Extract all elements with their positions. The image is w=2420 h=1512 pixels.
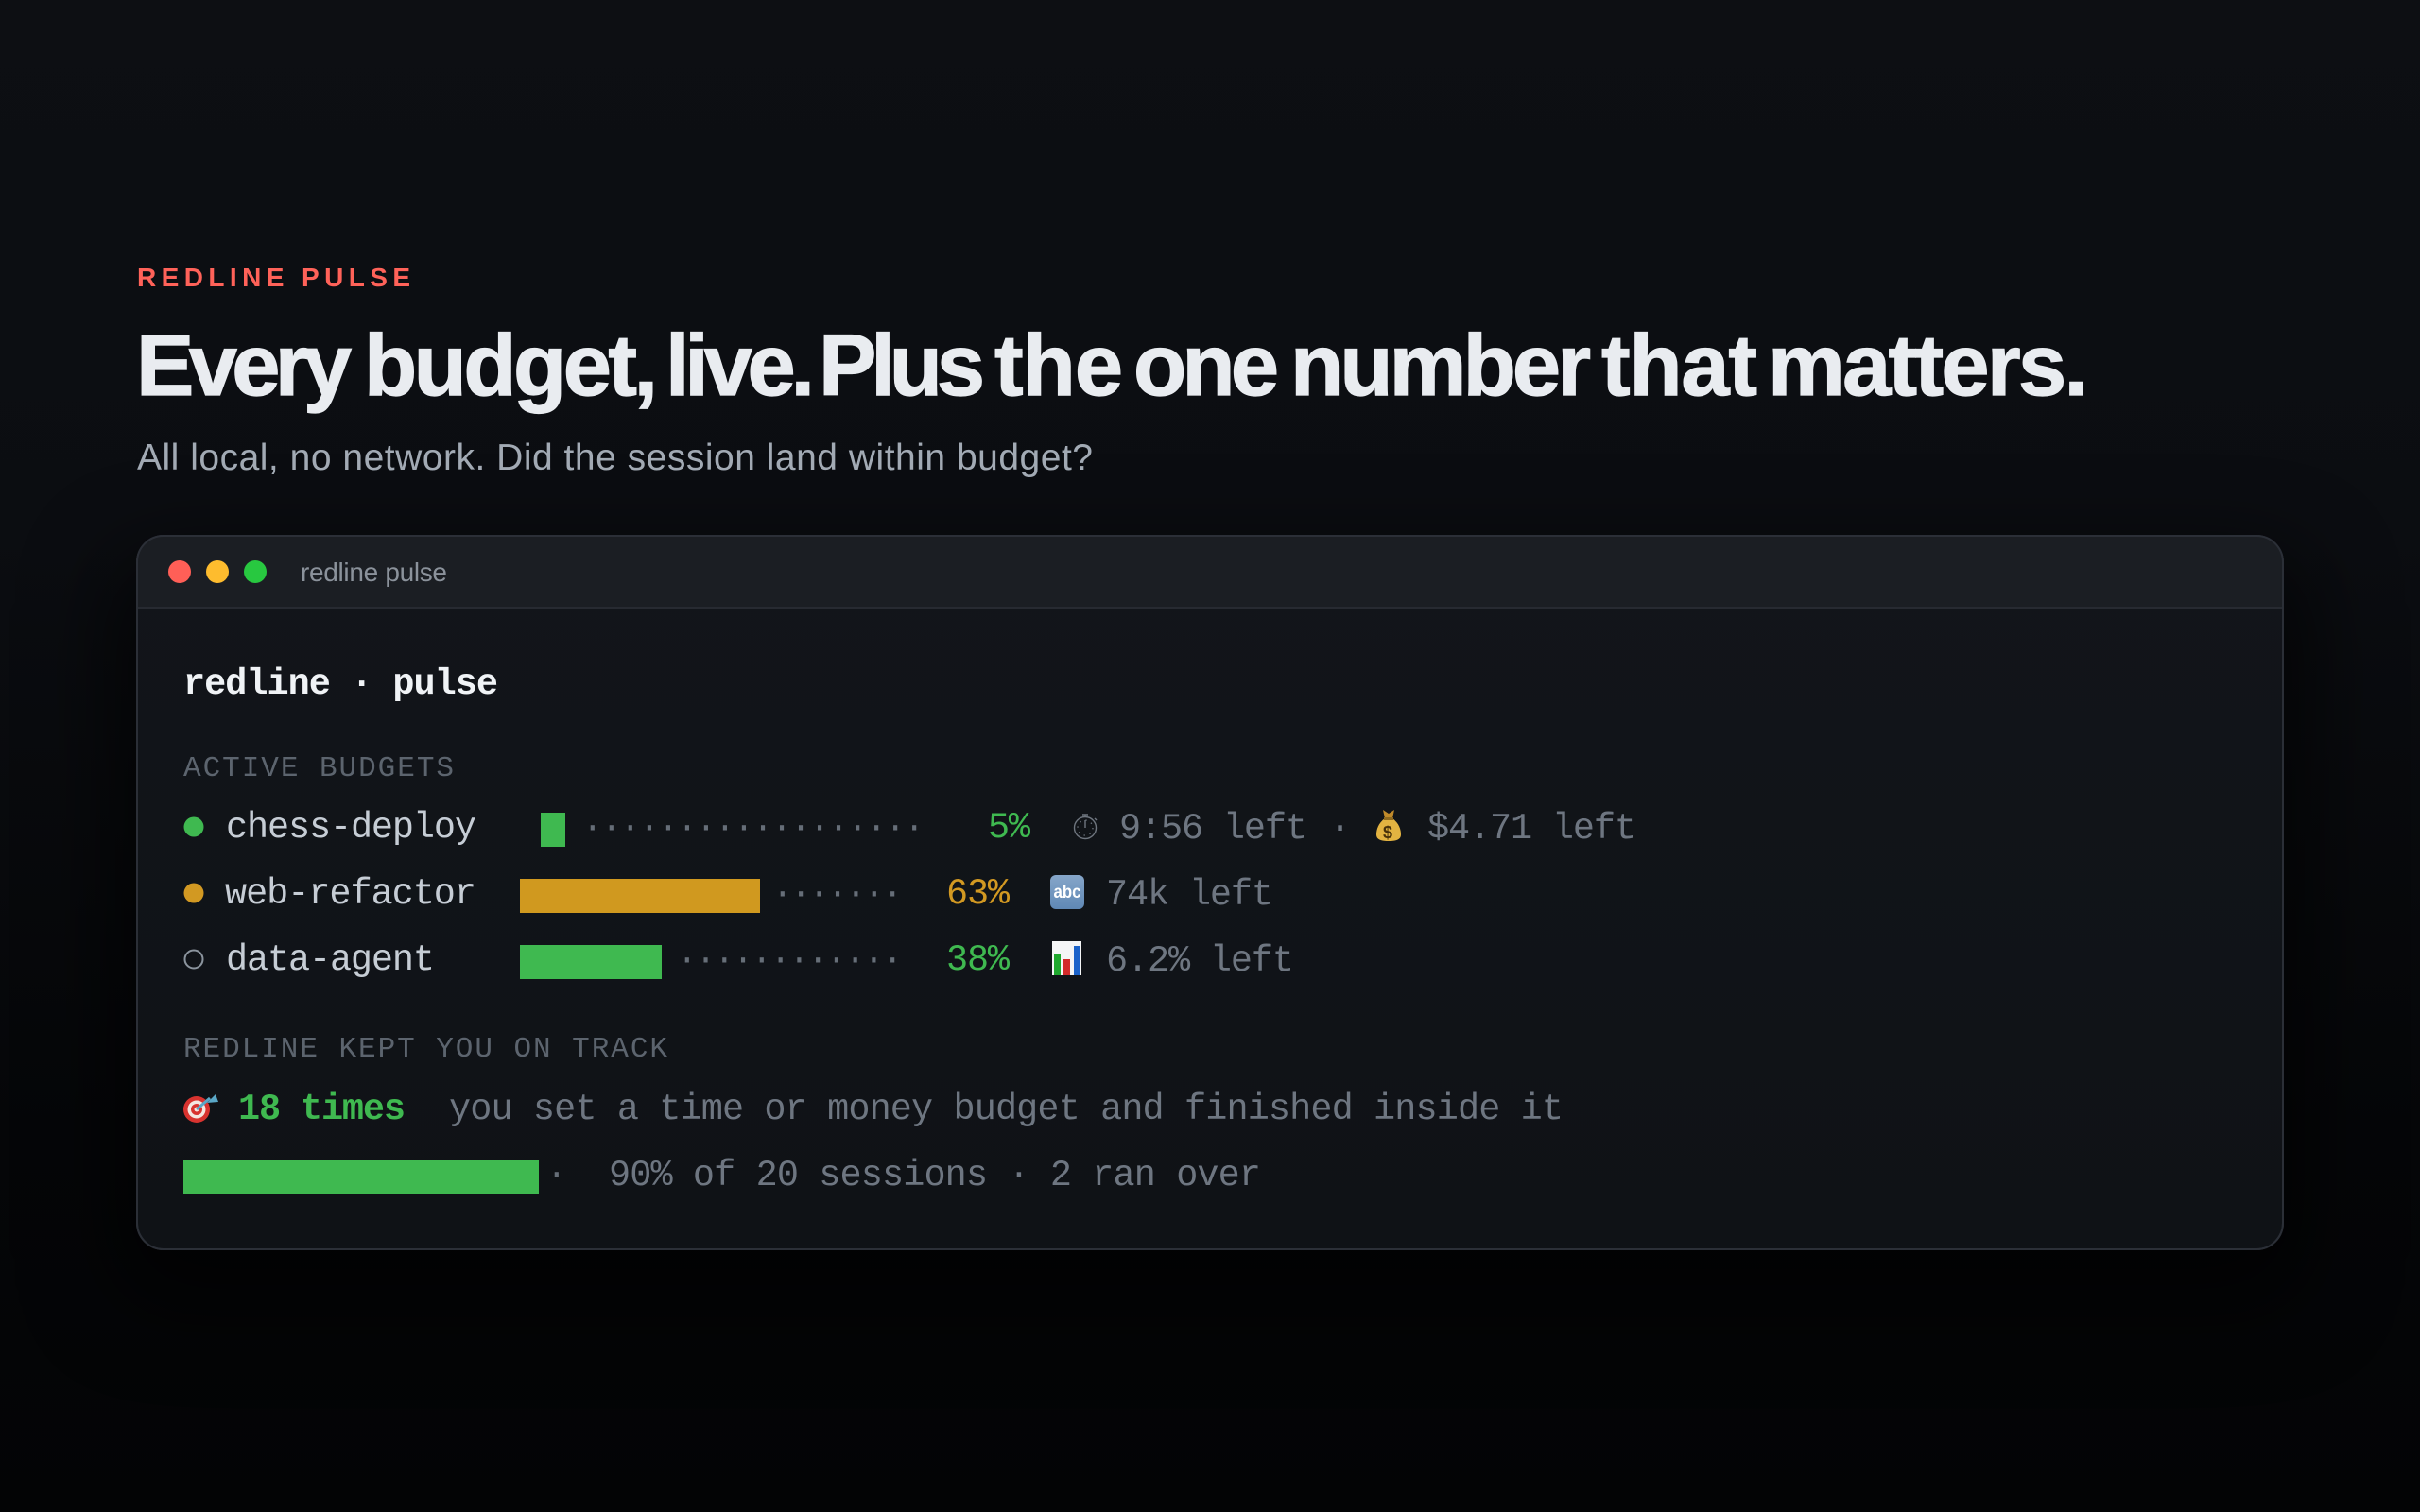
title: Every xyxy=(136,318,352,414)
budget row: web-refactor xyxy=(183,873,1273,916)
budget row: web-refactor: 74k left xyxy=(1106,874,1273,916)
icon: abc xyxy=(1050,875,1084,909)
title: matters. xyxy=(1768,318,2088,414)
budget row: web-refactor: 63% xyxy=(946,873,1011,915)
budget row: web-refactor: ······· xyxy=(772,875,903,914)
section label: active budgets: ACTIVE BUDGETS xyxy=(183,752,454,785)
budget row: web-refactor: web-refactor xyxy=(225,873,476,915)
icon: money bag xyxy=(1376,810,1401,842)
panel: terminal window xyxy=(137,536,2283,1249)
summary bar line: · xyxy=(546,1156,567,1194)
budget row: data-agent: 38% xyxy=(946,939,1011,981)
budget row: data-agent: ············ xyxy=(677,941,903,980)
budget row: chess-deploy: chess-deploy xyxy=(226,807,476,849)
budget row: chess-deploy: $4.71 left xyxy=(1427,808,1636,850)
budget row: chess-deploy xyxy=(183,807,1636,850)
budget row: data-agent: data-agent xyxy=(226,939,435,981)
icon: bar chart xyxy=(1052,941,1081,975)
icon: target with dart xyxy=(183,1094,218,1123)
eyebrow: REDLINE PULSE: REDLINE PULSE xyxy=(137,263,410,292)
stat line: 18 times: you set a time or money budget and finished inside it xyxy=(449,1089,1564,1130)
title: that xyxy=(1601,318,1757,414)
section label: redline kept you on track: REDLINE KEPT YOU ON TRACK xyxy=(183,1033,667,1066)
summary bar line: 90% of 20 sessions · 2 ran over xyxy=(609,1155,1261,1196)
icon: money bag: $ xyxy=(1383,823,1392,842)
title: the xyxy=(994,318,1123,414)
window title bar: redline pulse xyxy=(301,558,447,587)
budget row: data-agent xyxy=(185,939,1294,982)
title: Plus xyxy=(819,318,985,414)
title: one xyxy=(1133,318,1279,414)
title: budget, xyxy=(364,318,658,414)
budget row: data-agent: 6.2% left xyxy=(1106,940,1294,982)
stat line: 18 times: 18 times xyxy=(238,1089,406,1130)
terminal heading: redline · pulse xyxy=(183,663,498,705)
budget row: chess-deploy: 5% xyxy=(988,807,1031,849)
budget row: chess-deploy: 9:56 left xyxy=(1119,808,1307,850)
icon: abc: abc xyxy=(1053,883,1081,902)
icon: stopwatch xyxy=(1074,815,1097,839)
title: live. xyxy=(666,318,815,414)
budget row: chess-deploy: · xyxy=(1329,808,1351,850)
window title bar xyxy=(137,536,2283,1249)
title: number xyxy=(1290,318,1591,414)
summary bar line xyxy=(183,1155,1261,1196)
subtitle: All local, no network. Did the session land within budget? xyxy=(137,438,1093,478)
budget row: chess-deploy: ·················· xyxy=(582,809,925,848)
